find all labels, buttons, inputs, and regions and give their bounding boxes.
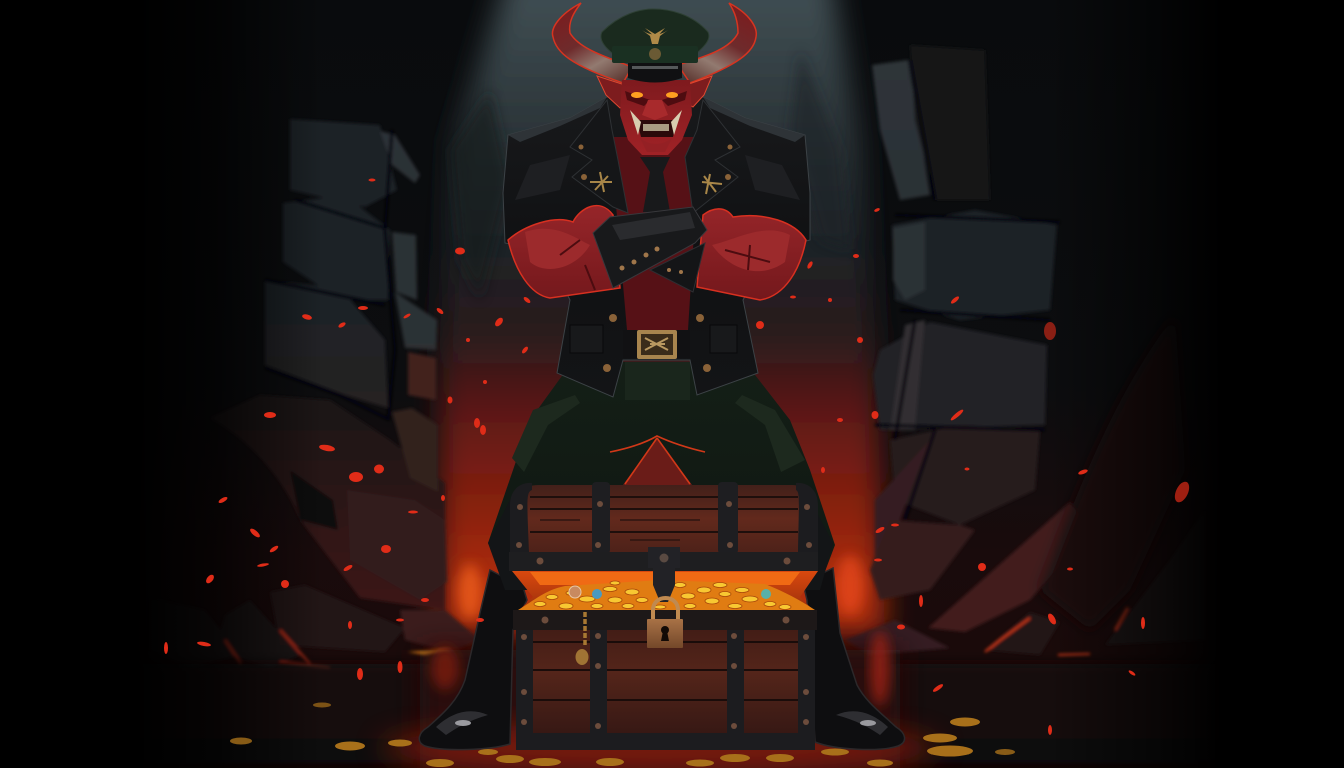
shoulder highlights — [508, 97, 607, 142]
hasp — [648, 547, 680, 602]
demon: officer cap — [601, 9, 709, 82]
chest body — [516, 630, 815, 750]
right cave wall — [845, 45, 1205, 655]
cave floor — [130, 630, 1215, 768]
tie — [640, 157, 670, 212]
ember sparks — [164, 178, 1192, 735]
demon: crossed arms — [508, 206, 806, 300]
demon: horns — [552, 3, 756, 83]
cargo pockets — [512, 395, 580, 472]
scattered floor coins — [230, 702, 1015, 767]
demon: cargo trousers — [488, 362, 835, 590]
chest lid — [510, 485, 818, 552]
gold coins heap — [518, 580, 815, 610]
padlock — [653, 598, 678, 622]
demon: boots — [419, 568, 905, 750]
demon: belt and buckle — [570, 325, 737, 359]
chain — [583, 612, 587, 646]
crotch opening — [623, 438, 692, 485]
left cave wall — [150, 119, 480, 668]
demon: jacket — [503, 97, 810, 397]
treasure chest — [509, 482, 818, 750]
inner glow — [512, 571, 818, 612]
shirt — [610, 137, 700, 330]
lapels — [570, 100, 628, 213]
demon: head — [597, 76, 712, 155]
lower cuff — [650, 243, 705, 292]
leather gauntlet — [593, 207, 707, 288]
